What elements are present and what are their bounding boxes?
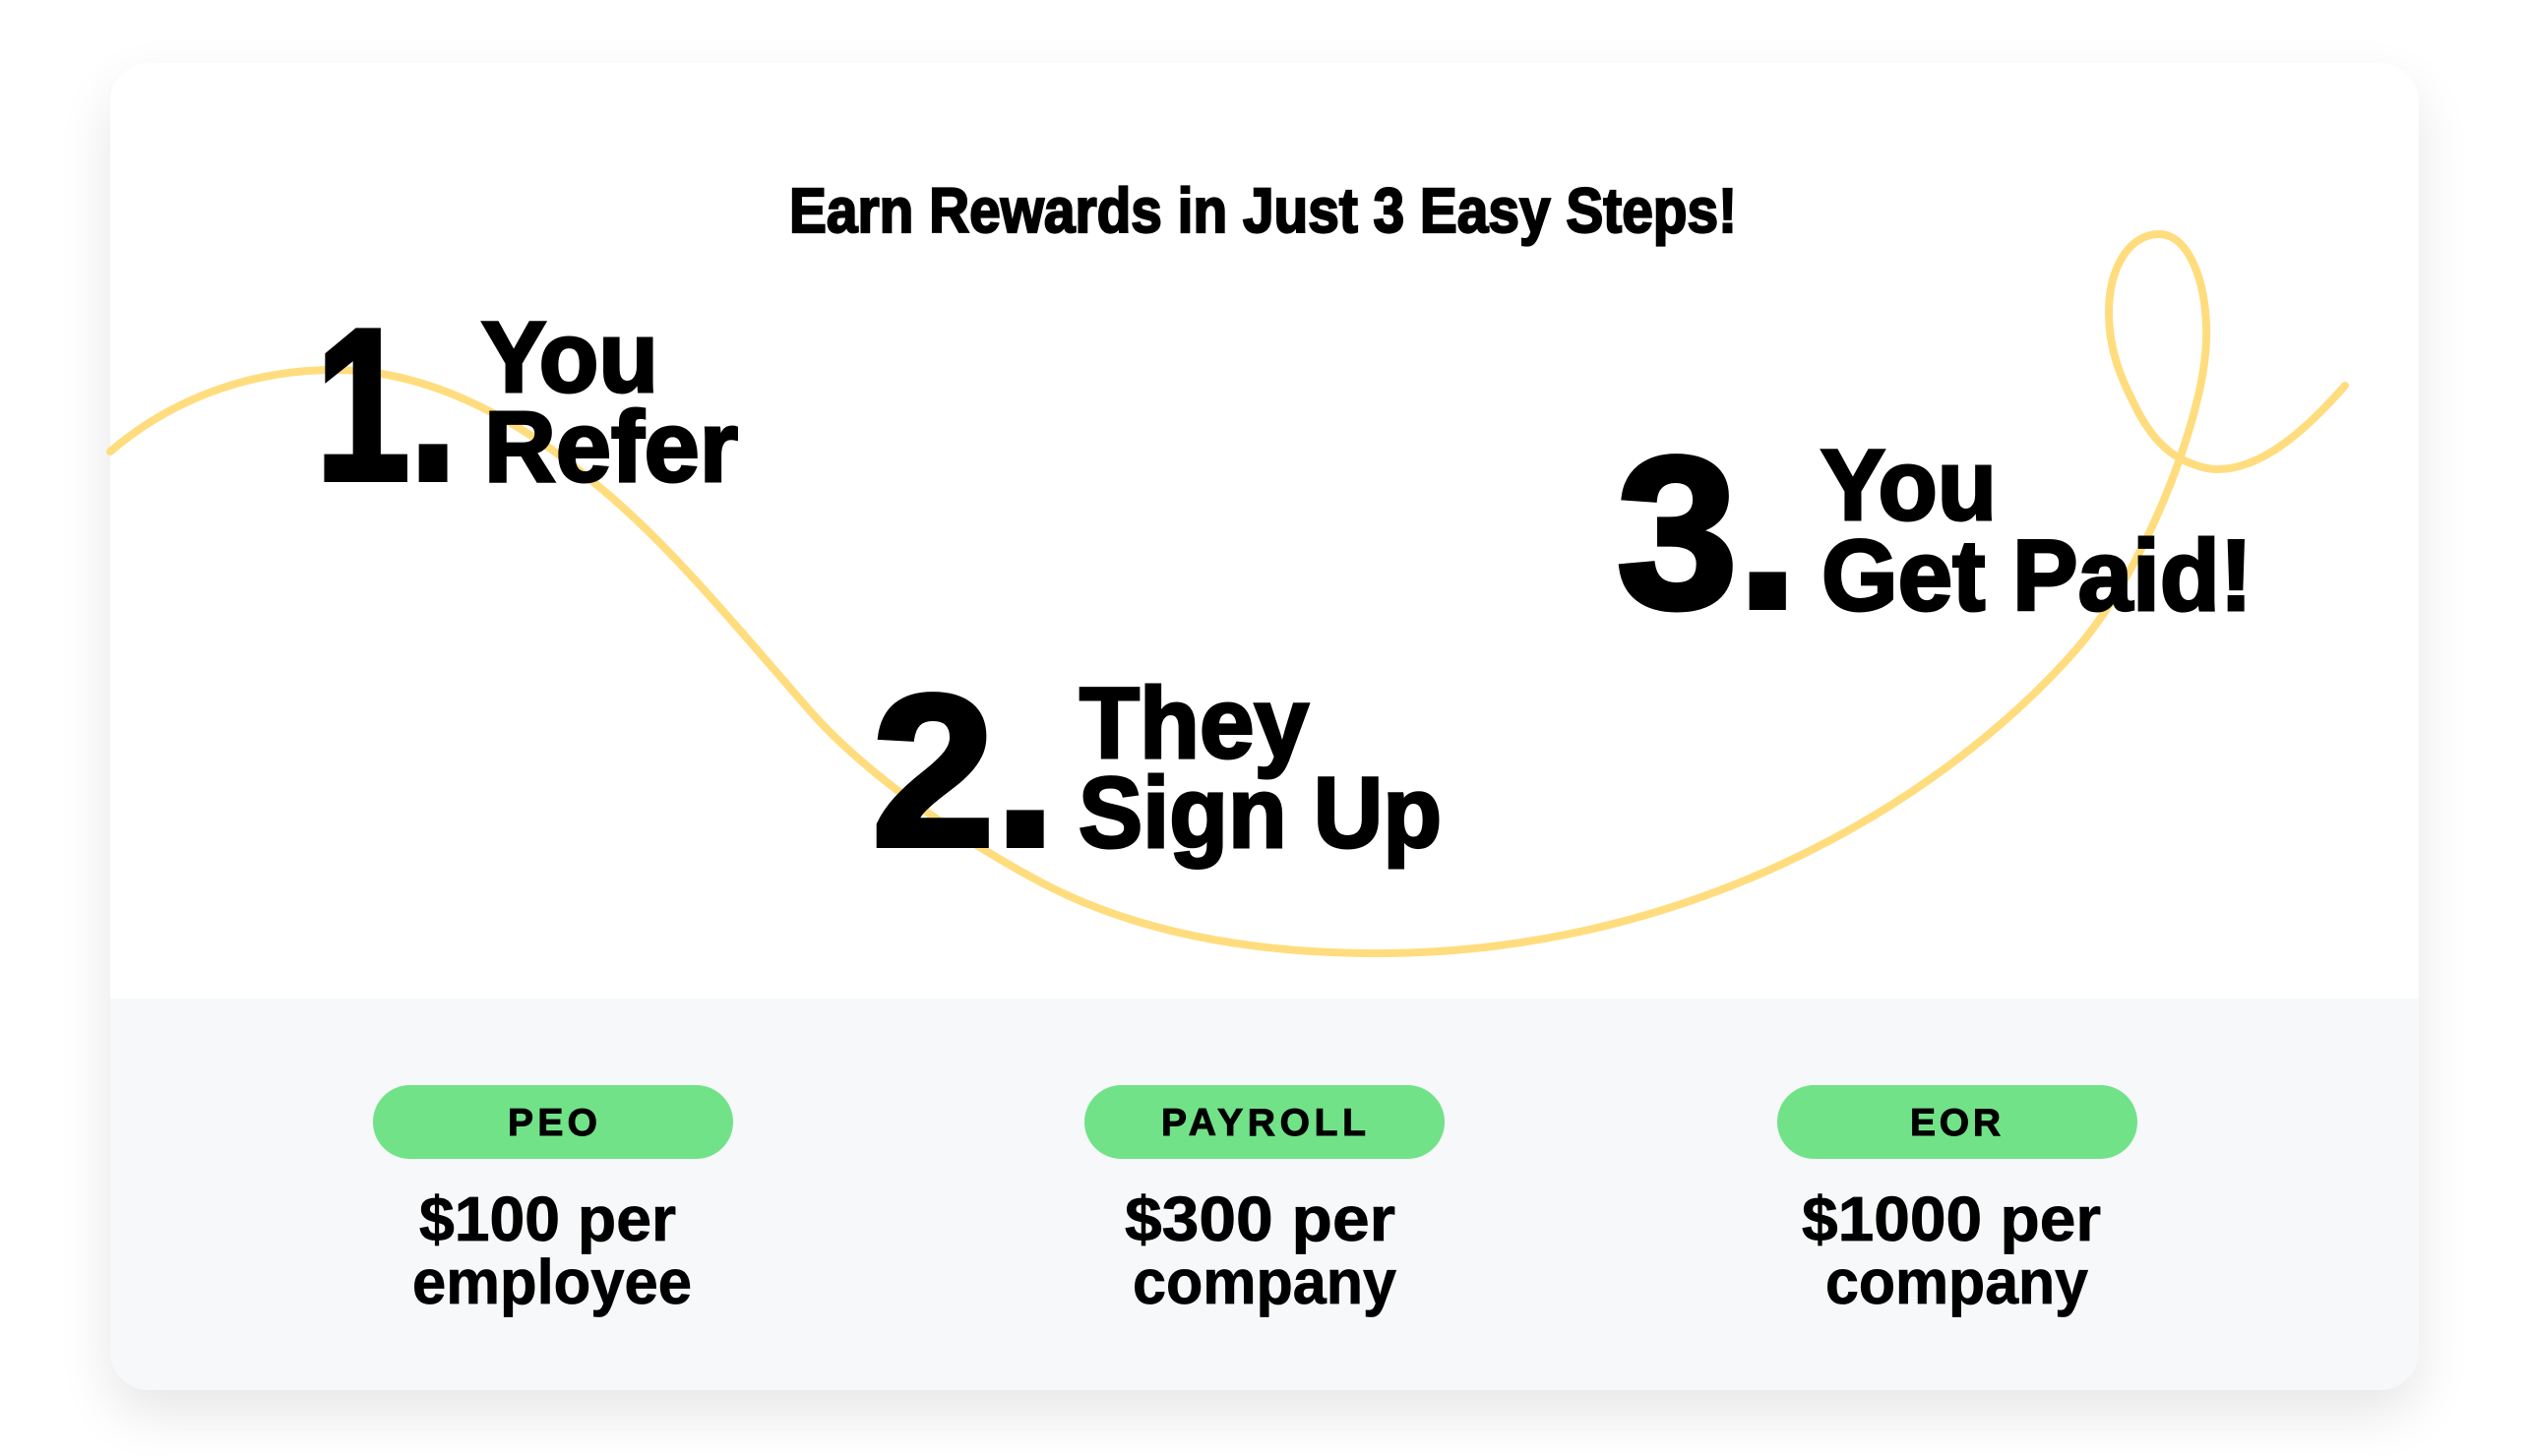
step 2 label: They — [1080, 667, 1309, 779]
reward: PAYROLL — [1084, 1085, 1445, 1317]
panel: rewards footer — [110, 999, 2419, 1390]
step 1 number: 1. — [316, 285, 457, 525]
PEO pill: PEO — [508, 1102, 597, 1144]
EOR amount: company — [1825, 1246, 2088, 1317]
PAYROLL pill — [1084, 1085, 1445, 1159]
PEO pill — [373, 1085, 733, 1159]
step 1 — [316, 285, 738, 525]
PEO amount: employee — [412, 1246, 692, 1317]
PAYROLL amount: $300 per — [1125, 1183, 1395, 1254]
PEO amount: $100 per — [419, 1183, 676, 1254]
PEO amount — [412, 1183, 692, 1317]
reward: EOR — [1777, 1085, 2137, 1317]
step 3 — [1617, 413, 2253, 653]
step 2 label — [1079, 667, 1442, 869]
step 1 label — [481, 301, 738, 503]
step 3 label: Get Paid! — [1821, 519, 2253, 632]
curve: yellow looping line — [110, 234, 2345, 953]
step 2 number: 2. — [872, 651, 1056, 891]
EOR pill — [1777, 1085, 2137, 1159]
step 3 label: You — [1821, 429, 1997, 541]
step 3 label — [1821, 429, 2253, 632]
step 1 label: Refer — [484, 391, 738, 503]
step 2 — [872, 651, 1442, 891]
EOR amount — [1802, 1183, 2101, 1317]
title: Earn Rewards in Just 3 Easy Steps! — [789, 175, 1737, 246]
EOR amount: $1000 per — [1802, 1183, 2101, 1254]
step 3 number: 3. — [1617, 413, 1798, 653]
PAYROLL pill: PAYROLL — [1161, 1102, 1366, 1144]
step 1 label: You — [481, 301, 658, 413]
reward: PEO — [373, 1085, 733, 1317]
PAYROLL amount — [1125, 1183, 1396, 1317]
step 2 label: Sign Up — [1079, 757, 1442, 869]
PAYROLL amount: company — [1133, 1246, 1396, 1317]
EOR pill: EOR — [1910, 1102, 2001, 1144]
